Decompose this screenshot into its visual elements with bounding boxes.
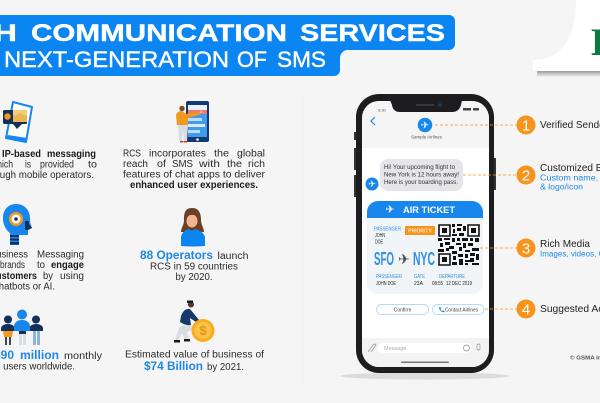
- callout 2: customized branding: 2: [522, 168, 530, 184]
- text: RCS incorporates: incorporates: [149, 148, 206, 160]
- text: 890 million: [0, 348, 102, 372]
- message bubble: Hi! Your upcoming flight to: [384, 165, 456, 171]
- suggested action buttons: Confirm: [394, 307, 411, 313]
- callout 1: verified sender: [435, 116, 600, 134]
- air ticket: PASSENGER: [374, 226, 401, 232]
- text: RCS incorporates: rich: [248, 159, 265, 170]
- text: RCS incorporates: the: [214, 148, 230, 160]
- logo panel: [533, 0, 600, 77]
- text: Estimated value: [125, 350, 264, 373]
- air ticket: GATE: [414, 274, 425, 280]
- message input bar: Message: [384, 346, 406, 352]
- text: Estimated value: $74 Billion: [144, 359, 203, 373]
- icon: AI head: [3, 204, 32, 245]
- title banner: COMMUNICATION: [31, 20, 287, 47]
- air ticket: JOHN: [375, 233, 385, 239]
- air ticket: ✈: [398, 251, 410, 267]
- text: RCS incorporates: features of chat apps to deliver: [123, 170, 266, 180]
- icon: woman operator: [181, 208, 205, 246]
- callout 4: suggested actions: [485, 300, 600, 318]
- air ticket: SFO: [374, 248, 394, 269]
- air ticket: NYC: [413, 248, 435, 269]
- status bar: 9:30: [378, 108, 387, 112]
- air ticket: PRIORITY: [408, 228, 432, 234]
- air ticket: AIR TICKET: [403, 205, 456, 215]
- text: 88 Operators: launch: [218, 251, 248, 262]
- text: Estimated value: by 2021.: [207, 362, 244, 373]
- text: IP-based messaging: [0, 149, 98, 181]
- text: Business Messaging: Messaging: [37, 250, 84, 260]
- phone mockup: [340, 94, 510, 380]
- callout 3: rich media: Rich Media: [540, 239, 590, 250]
- text: RCS incorporates: [123, 148, 266, 191]
- text: Business Messaging: using: [60, 271, 84, 282]
- air ticket: ✈: [385, 204, 395, 216]
- air ticket: [367, 201, 483, 294]
- text: Business Messaging: brands: [0, 260, 25, 271]
- callout 4: suggested actions: 4: [522, 302, 530, 318]
- text: 88 Operators: RCS in 59 countries: [150, 262, 238, 272]
- title banner: OF: [237, 47, 267, 72]
- callout 2: customized branding: [463, 163, 600, 192]
- text: 890 million: monthly: [64, 351, 102, 362]
- text: IP-based messaging: is: [25, 160, 31, 170]
- callout 1: verified sender: 1: [522, 118, 530, 134]
- air ticket: DEPARTURE: [439, 274, 465, 280]
- back arrow: [371, 117, 375, 125]
- title banner: SERVICES: [300, 20, 445, 47]
- text: RCS incorporates: of: [157, 159, 166, 170]
- icon: person pushing coin: [174, 300, 214, 342]
- title banner: [0, 15, 455, 76]
- status bar: [378, 108, 479, 112]
- text: Business Messaging: engage: [51, 260, 85, 271]
- air ticket: 08:55: [432, 281, 443, 287]
- text: RCS incorporates: global: [237, 148, 265, 160]
- callout 3: rich media: 3: [522, 240, 530, 258]
- text: Estimated value: Estimated value of business of: [125, 350, 264, 360]
- text: RCS incorporates: SMS: [172, 159, 193, 170]
- text: IP-based messaging: IP-based: [2, 149, 41, 160]
- air ticket: JOHN DOE: [376, 281, 397, 287]
- message bubble: [366, 159, 463, 191]
- text: IP-based messaging: messaging: [47, 149, 96, 160]
- air ticket: 12 DEC 2019: [446, 281, 472, 287]
- text: IP-based messaging: to: [88, 160, 98, 170]
- text: 88 Operators: [140, 250, 248, 283]
- icon: group of people: [1, 310, 43, 345]
- message bubble: ✈: [368, 179, 376, 189]
- callout 3: rich media: [480, 238, 600, 258]
- air ticket: PASSENGER: [376, 274, 402, 280]
- air ticket: 23A: [414, 281, 424, 287]
- message bubble: New York is 12 hours away!: [384, 172, 459, 178]
- text: Business Messaging: by: [43, 271, 53, 282]
- suggested action buttons: Contact Airlines: [445, 307, 478, 313]
- verified sender: [411, 118, 443, 140]
- QR code: [438, 224, 479, 265]
- title banner: SMS: [277, 47, 326, 72]
- text: IP-based messaging: provided: [40, 160, 74, 170]
- air ticket: DOE: [375, 240, 383, 246]
- title banner: NEXT-GENERATION: [4, 47, 229, 72]
- message input bar: [362, 338, 489, 367]
- callout 2: customized branding: & logo/icon: [540, 182, 583, 192]
- suggested action buttons: [376, 304, 484, 314]
- verified sender: ✈: [421, 120, 429, 132]
- text: RCS incorporates: reach: [123, 159, 148, 170]
- text: RCS incorporates: with: [198, 159, 220, 170]
- text: 88 Operators: by 2020.: [176, 272, 212, 283]
- text: 890 million: million: [20, 348, 59, 362]
- text: Business Messaging: [0, 250, 85, 292]
- message bubble: Here is your boarding pass.: [384, 180, 458, 186]
- text: RCS incorporates: the: [227, 159, 243, 170]
- icon: person at phone: [176, 101, 209, 142]
- text: 88 Operators: 88 Operators: [140, 250, 213, 262]
- icon: phone with message: [3, 102, 32, 142]
- verified sender: Sample Airlines: [411, 134, 443, 140]
- text: Business Messaging: to: [37, 260, 46, 271]
- text: RCS incorporates: RCS: [123, 148, 141, 160]
- icon: person pushing coin: $: [199, 323, 207, 338]
- text: RCS incorporates: enhanced user experiences.: [130, 180, 258, 191]
